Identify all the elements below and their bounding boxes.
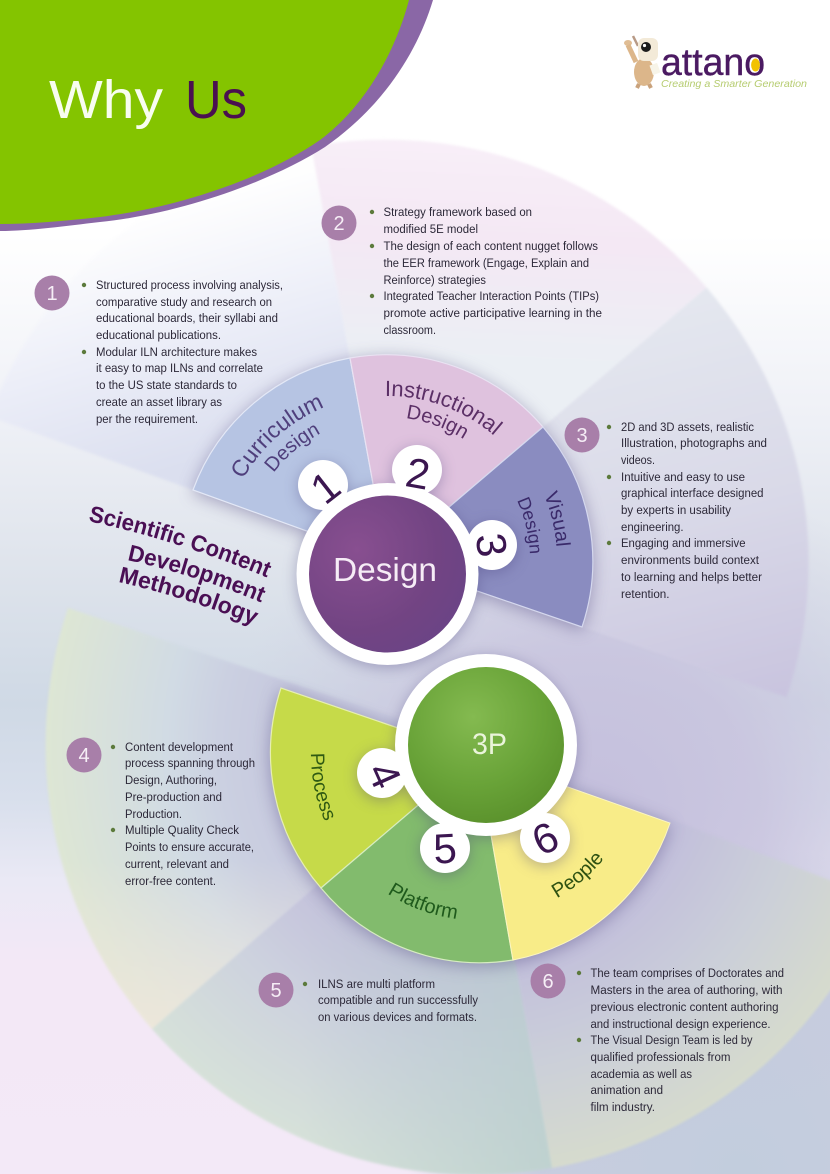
wedge: platform: [321, 755, 513, 963]
copy: [590, 966, 784, 1114]
copy: 2D and 3D assets, realistic: [621, 420, 754, 434]
copy: engineering.: [621, 520, 684, 534]
copy: Strategy framework based on: [384, 205, 532, 219]
copy: compatible and run successfully: [318, 993, 479, 1007]
copy: ILNS are multi platform: [318, 977, 435, 991]
copy: [125, 740, 255, 888]
number 3: 3: [467, 530, 516, 560]
text block 2: [322, 205, 602, 337]
copy: per the requirement.: [96, 412, 198, 426]
copy: previous electronic content authoring: [590, 1000, 779, 1014]
copy: comparative study and research on: [96, 295, 272, 309]
heading: scientific content development methodology: Scientific Content: [90, 506, 272, 578]
copy: Points to ensure accurate,: [125, 840, 254, 854]
copy: promote active participative learning in the: [384, 306, 602, 320]
badge 5: 5: [270, 980, 282, 1002]
fan labels: design: Design: [264, 426, 320, 472]
copy: academia as well as: [590, 1067, 692, 1081]
hub circle: [408, 667, 564, 823]
hub ring and number tabs: [296, 445, 517, 665]
copy: [621, 420, 767, 601]
copy: animation and: [590, 1083, 663, 1097]
fan labels: design: Curriculum: [232, 397, 324, 476]
hub label: 3P: [472, 728, 507, 761]
copy: qualified professionals from: [590, 1050, 730, 1064]
fan labels: design: Design: [518, 497, 540, 554]
title: Why Us: Why: [49, 70, 163, 130]
copy: videos.: [621, 453, 655, 467]
badge 2: [322, 206, 356, 240]
copy: Reinforce) strategies: [384, 273, 486, 287]
wedge: curriculum design: [193, 358, 387, 560]
tagline: Creating a Smarter Generation: [661, 78, 807, 90]
badge 2: 2: [333, 213, 345, 235]
bullets: [370, 210, 374, 298]
icon: mascot: [624, 36, 660, 88]
title: Why Us: Us: [185, 70, 247, 130]
copy: Masters in the area of authoring, with: [590, 983, 783, 997]
fan labels: 3P: Platform: [388, 882, 457, 919]
number 1: 1: [302, 462, 349, 513]
3P hub: [357, 654, 577, 873]
title: Why Us: [49, 70, 247, 130]
hub label: Design: [333, 551, 437, 588]
fan labels: 3P: [310, 754, 602, 919]
fan labels: 3P: People: [551, 854, 602, 898]
copy: [384, 205, 602, 337]
copy: Modular ILN architecture makes: [96, 345, 257, 359]
copy: educational boards, their syllabi and: [96, 311, 278, 325]
copy: the EER framework (Engage, Explain and: [384, 256, 589, 270]
fan labels: design: Design: [407, 404, 467, 439]
copy: it easy to map ILNs and correlate: [96, 361, 263, 375]
copy: and instructional design experience.: [590, 1017, 770, 1031]
copy: retention.: [621, 587, 670, 601]
fan labels: design: [232, 380, 571, 554]
copy: Intuitive and easy to use: [621, 470, 745, 484]
copy: [318, 977, 479, 1024]
badge 3: 3: [576, 425, 588, 447]
heading: scientific content development methodology: [90, 506, 272, 626]
background wheel: lower fan: [46, 608, 830, 1174]
copy: Engaging and immersive: [621, 536, 746, 550]
bullets: [111, 745, 115, 832]
wedge: people: [477, 755, 670, 960]
copy: current, relevant and: [125, 857, 229, 871]
fan labels: 3P: Process: [310, 754, 334, 820]
heading: scientific content development methodology: Development: [128, 544, 266, 602]
copy: educational publications.: [96, 328, 221, 342]
design fan: [193, 355, 593, 627]
copy: to learning and helps better: [621, 570, 762, 584]
text block 1: [34, 276, 283, 426]
copy: environments build context: [621, 553, 760, 567]
badge 1: [34, 276, 70, 310]
copy: on various devices and formats.: [318, 1010, 477, 1024]
copy: Illustration, photographs and: [621, 436, 767, 450]
copy: to the US state standards to: [96, 378, 237, 392]
number 5: 5: [432, 824, 458, 873]
3P fan: [271, 688, 670, 963]
copy: Integrated Teacher Interaction Points (TIPs): [384, 289, 599, 303]
copy: process spanning through: [125, 756, 255, 770]
text block 3: [564, 418, 767, 601]
text block 5: [258, 972, 479, 1024]
copy: The team comprises of Doctorates and: [590, 966, 784, 980]
logo: attano: [624, 36, 807, 90]
copy: The design of each content nugget follows: [384, 239, 598, 253]
badge 3: [564, 418, 600, 452]
badge 4: [66, 738, 102, 772]
wedge: process: [271, 688, 477, 888]
copy: Pre-production and: [125, 790, 222, 804]
fan labels: design: Instructional: [386, 380, 504, 435]
design hub: [296, 445, 517, 665]
badge 4: 4: [78, 745, 90, 767]
copy: error-free content.: [125, 874, 216, 888]
bullets: [577, 971, 581, 1042]
badge 6: [530, 964, 566, 998]
wedge: instructional design: [350, 355, 543, 560]
copy: modified 5E model: [384, 222, 478, 236]
copy: The Visual Design Team is led by: [590, 1033, 753, 1047]
hub circle: [309, 496, 466, 652]
number 6: 6: [525, 812, 566, 865]
wordmark: attano: [661, 42, 765, 84]
bullet: [303, 982, 307, 986]
bullets: [607, 425, 611, 545]
number 2: 2: [402, 448, 433, 499]
badge 5: [258, 972, 294, 1008]
fan labels: design: Visual: [546, 490, 571, 546]
number 4: 4: [358, 755, 411, 795]
hub ring and number tabs: [357, 654, 577, 873]
copy: Production.: [125, 807, 182, 821]
wedge: visual design: [387, 427, 593, 627]
badge 6: 6: [542, 971, 554, 993]
heading: scientific content development methodology: Methodology: [120, 566, 258, 626]
text block 4: [66, 738, 255, 888]
text block 6: [530, 964, 784, 1114]
copy: classroom.: [384, 323, 436, 337]
copy: film industry.: [590, 1100, 655, 1114]
badge 1: 1: [46, 283, 58, 305]
copy: graphical interface designed: [621, 486, 764, 500]
copy: Design, Authoring,: [125, 773, 217, 787]
copy: [96, 278, 283, 426]
copy: Content development: [125, 740, 234, 754]
copy: Multiple Quality Check: [125, 823, 240, 837]
copy: by experts in usability: [621, 503, 732, 517]
copy: Structured process involving analysis,: [96, 278, 283, 292]
header: green corner with purple band: [0, 0, 433, 231]
background wheel: upper fan: [0, 140, 809, 697]
bullets: [82, 283, 86, 354]
copy: create an asset library as: [96, 395, 222, 409]
